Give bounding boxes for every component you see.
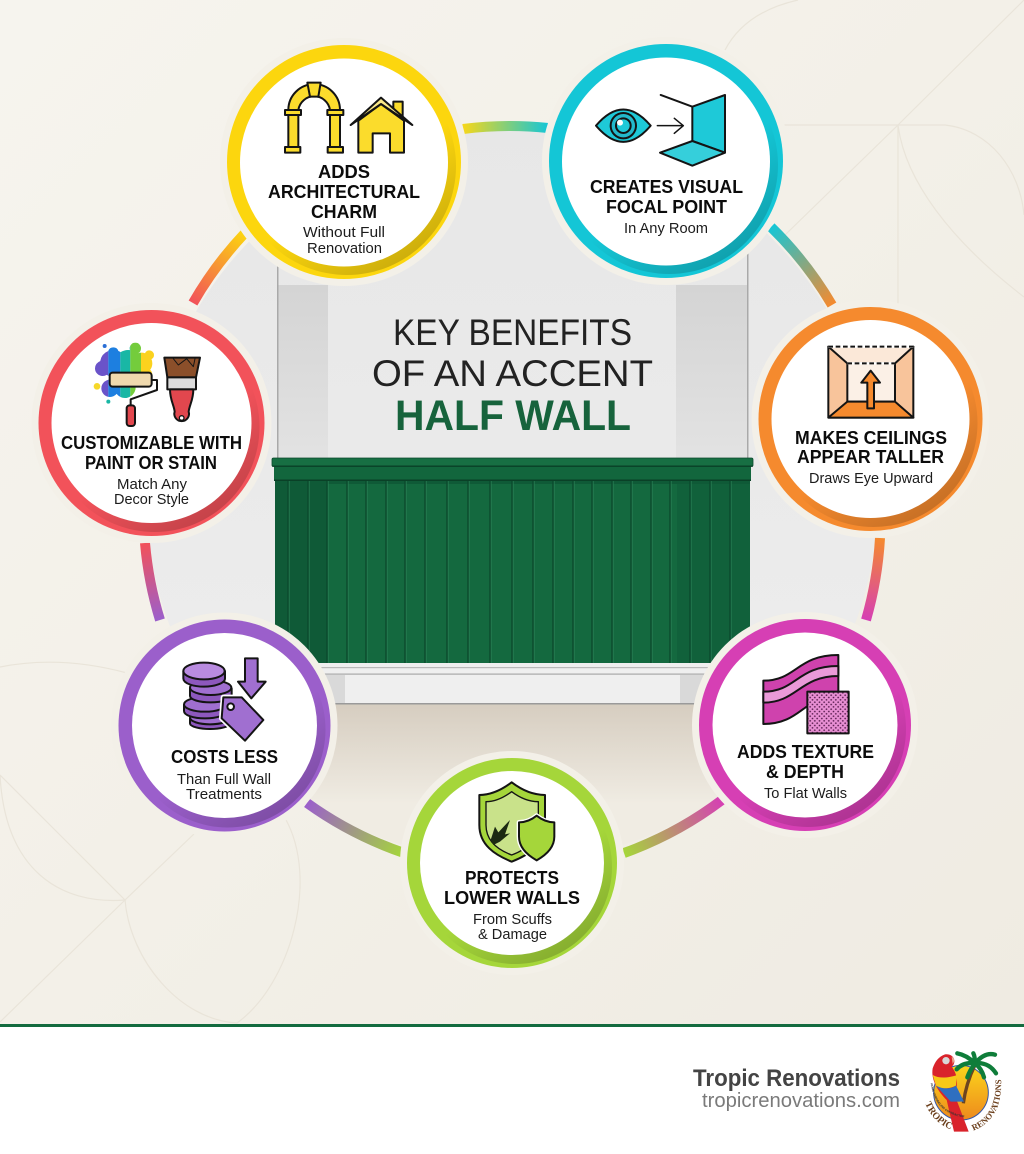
title [372, 312, 653, 440]
panel: adds texture and depth: & DEPTH [766, 762, 844, 782]
green wainscot panel [272, 458, 753, 663]
panel: customizable with paint or stain [32, 303, 272, 543]
logo: parrot and palm: TROPIC [926, 1100, 952, 1129]
website: tropicrenovations.com [702, 1090, 900, 1112]
title: OF AN ACCENT [372, 353, 653, 394]
panel: customizable with paint or stain: Match Any [117, 477, 188, 493]
panel: protects lower walls: LOWER WALLS [444, 888, 580, 908]
panel: protects lower walls [400, 751, 624, 975]
panel: adds architectural charm: Renovation [307, 241, 382, 257]
panel: adds architectural charm: ADDS [318, 162, 370, 182]
panel: adds texture and depth: To Flat Walls [764, 786, 847, 802]
panel: adds architectural charm: ARCHITECTURAL [268, 182, 420, 202]
brand name: Tropic Renovations [693, 1065, 900, 1092]
panel: makes ceilings appear taller: APPEAR TALLER [797, 447, 944, 467]
floor [310, 704, 718, 804]
panel: costs less: Than Full Wall [177, 772, 271, 788]
panel: customizable with paint or stain: Decor Style [114, 492, 189, 508]
panel: creates visual focal point [542, 37, 790, 285]
panel: protects lower walls: & Damage [478, 927, 547, 943]
panel: adds architectural charm: Without Full [303, 225, 385, 241]
panel: protects lower walls: PROTECTS [465, 868, 559, 888]
panel: makes ceilings appear taller: MAKES CEILINGS [795, 428, 947, 448]
icon: room with upward arrow [828, 347, 913, 418]
back wall side panels [277, 285, 328, 465]
title: KEY BENEFITS [393, 312, 632, 353]
title: HALF WALL [395, 392, 631, 440]
panel: adds texture and depth: ADDS TEXTURE [737, 742, 874, 762]
icon: paint roller and brush [93, 340, 200, 426]
logo: parrot and palm [926, 1051, 1002, 1132]
panel: makes ceilings appear taller: Draws Eye Upward [809, 471, 933, 487]
panel: creates visual focal point: CREATES VISUAL [590, 177, 743, 197]
connecting ring arcs [145, 126, 880, 853]
icon: arch and house [285, 83, 412, 153]
panel: costs less: Treatments [186, 787, 262, 803]
panel: makes ceilings appear taller [752, 300, 990, 538]
icon: coins, down arrow and price tag [183, 658, 266, 741]
logo: parrot and palm: RENOVATIONS [971, 1080, 1002, 1131]
logo: parrot and palm: HOME REMODELING CONTRACTOR [930, 1083, 964, 1118]
panel: protects lower walls: From Scuffs [473, 912, 552, 928]
icon: shields [479, 782, 554, 862]
baseboard [321, 667, 708, 704]
panel: creates visual focal point: FOCAL POINT [606, 197, 727, 217]
central grey circle with half wall scene [150, 131, 826, 794]
icon: eye, arrow and corner wall [596, 95, 725, 166]
footer [0, 1024, 1024, 1132]
panel: customizable with paint or stain: CUSTOMIZABLE WITH [61, 433, 242, 453]
panel: costs less [112, 612, 338, 838]
panel: creates visual focal point: In Any Room [624, 221, 708, 237]
panel: customizable with paint or stain: PAINT OR STAIN [85, 453, 217, 473]
panel: adds texture and depth [692, 612, 918, 838]
panel: costs less: COSTS LESS [171, 747, 278, 767]
panel: adds architectural charm [220, 38, 468, 286]
icon: wavy panel and textured swatch [763, 655, 849, 733]
panel: adds architectural charm: CHARM [311, 202, 377, 222]
